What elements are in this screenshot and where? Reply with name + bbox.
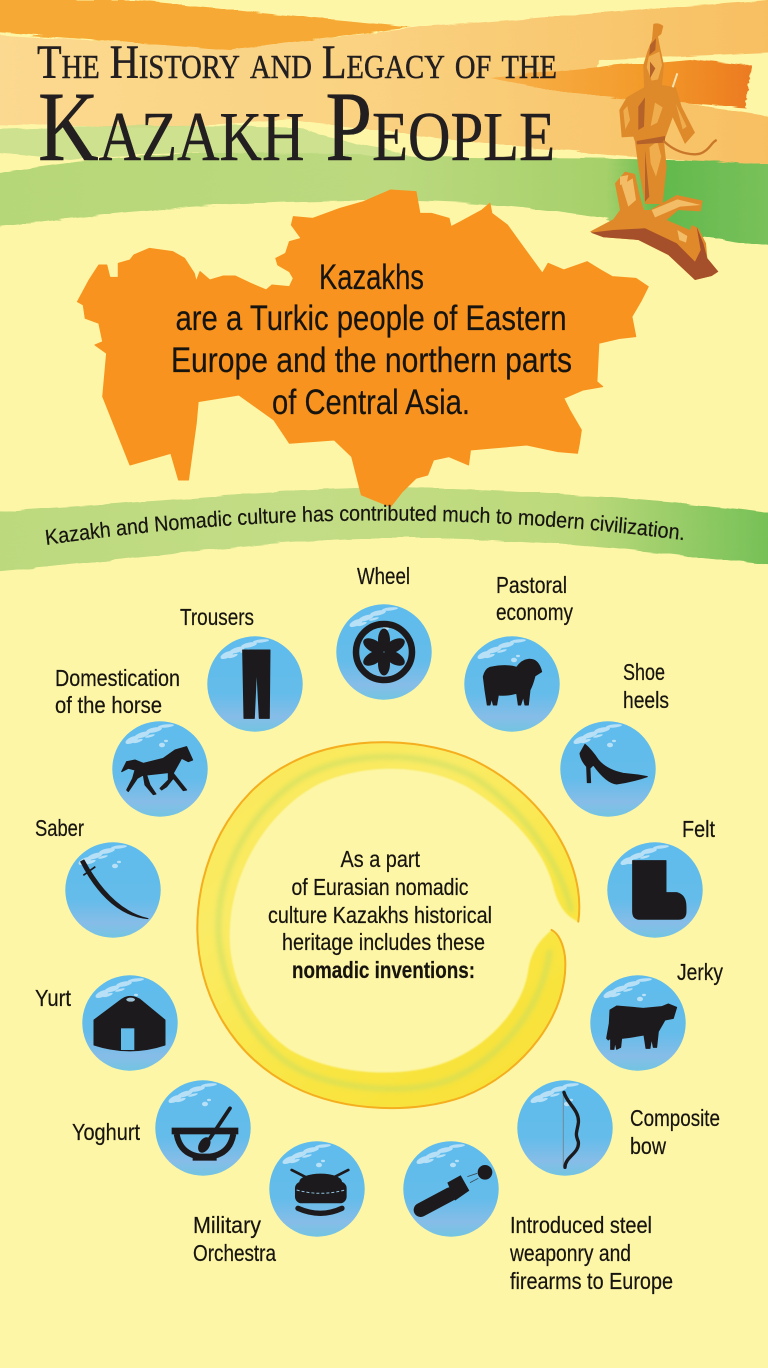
ring text: nomadic inventions: [292, 957, 475, 983]
item: domestication of the horse: of the horse [55, 692, 162, 718]
item: pastoral economy: Pastoral [496, 572, 567, 598]
map text: Kazakhs [319, 258, 424, 297]
item: pastoral economy [464, 572, 573, 732]
item: military orchestra: Military [193, 1212, 261, 1238]
item: jerky [590, 959, 723, 1071]
item: trousers [180, 604, 303, 732]
green brush band [0, 487, 768, 572]
item: yoghurt: Yoghurt [72, 1119, 141, 1145]
item: shoe heels [560, 659, 669, 817]
item: trousers: Trousers [180, 604, 254, 630]
item: yoghurt [72, 1080, 251, 1176]
item: composite bow: bow [630, 1133, 666, 1159]
ring text: As a part [340, 846, 421, 872]
title [37, 36, 557, 182]
ring text: of Eurasian nomadic [292, 874, 468, 900]
ring text: culture Kazakhs historical [268, 902, 492, 928]
ring text [268, 846, 492, 983]
map text: are a Turkic people of Eastern [176, 299, 566, 338]
item: shoe heels: Shoe [623, 659, 665, 685]
item: shoe heels: heels [623, 687, 669, 713]
map text [171, 258, 572, 422]
item: steel weaponry and firearms: weaponry and [509, 1240, 631, 1266]
item: felt [607, 816, 716, 938]
item: steel weaponry and firearms [403, 1141, 673, 1294]
item: domestication of the horse: Domestication [55, 665, 180, 691]
item: composite bow: Composite [630, 1105, 720, 1131]
item: composite bow [517, 1080, 720, 1176]
item: saber: Saber [35, 815, 84, 841]
item: wheel [336, 563, 432, 700]
item: pastoral economy: economy [496, 599, 573, 625]
item: steel weaponry and firearms: Introduced steel [510, 1212, 652, 1238]
title: Kazakh People [38, 71, 555, 182]
item: jerky: Jerky [677, 959, 723, 985]
brush strokes: header [0, 0, 768, 246]
map text: of Central Asia. [272, 383, 470, 422]
item: yurt: Yurt [35, 985, 72, 1011]
ring text: heritage includes these [282, 929, 485, 955]
item: military orchestra: Orchestra [193, 1240, 276, 1266]
map text: Europe and the northern parts [171, 341, 572, 380]
item: yurt [35, 975, 178, 1071]
title: The History and Legacy of the [37, 36, 557, 89]
map of Kazakhstan [78, 190, 648, 507]
item: domestication of the horse [55, 665, 208, 817]
item: saber [35, 815, 161, 938]
statue: warrior on winged leopard [590, 23, 718, 280]
item: military orchestra [193, 1141, 365, 1266]
item: wheel: Wheel [357, 563, 410, 589]
band caption: Kazakh and Nomadic culture has contributed much to modern civilization. [46, 504, 683, 545]
item: felt: Felt [682, 816, 716, 842]
central ring brush [197, 742, 579, 1108]
item: steel weaponry and firearms: firearms to Europe [510, 1268, 673, 1294]
